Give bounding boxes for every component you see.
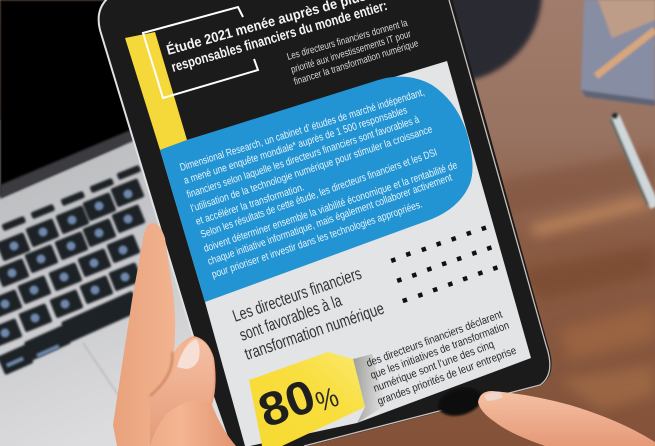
finger crease shadow [150,352,172,396]
thumb nail [177,339,200,369]
cube face [249,352,365,446]
left hand skin [113,223,236,446]
key legends [0,190,132,367]
cube shadow [353,354,386,423]
dark round object on desk [362,0,542,82]
tablet body [99,0,552,446]
notebook with pencil [581,0,655,106]
laptop [0,0,240,446]
section heading: transformation numérique [242,299,386,364]
intro paragraph: et accélérer la transformation. [194,181,306,228]
screen gray panel [160,61,531,446]
thumb highlight [150,338,214,446]
stat description: que les initiatives de transformation [369,320,511,382]
stat description [365,309,518,408]
tablet [99,0,552,446]
pen on desk [611,113,655,207]
stat description: grandes priorités de leur entreprise [376,345,518,408]
laptop hinge [0,128,140,199]
blue intro panel [160,77,473,302]
yellow side strip [125,32,187,150]
intro paragraph: financiers selon laquelle les directeurs financiers sont favorables à [185,114,421,201]
tablet silver edge left [99,0,228,446]
trackpad edge [83,343,125,405]
intro paragraph [178,86,459,281]
header [143,0,420,98]
tablet silver edge right [304,0,550,446]
left hand [113,223,236,446]
header subtitle: priorité aux investissements IT pour [290,29,413,76]
yellow cube with 80% [249,352,365,446]
home button [435,384,485,420]
header subtitle [286,18,420,88]
intro paragraph: l’utilisation de la technologie numérique pour stimuler la croissance [189,123,434,215]
header subtitle: Les directeurs financiers donnent la [286,18,409,63]
laptop screen [0,0,140,197]
stat description: numérique sont l’une des cinq [372,339,496,395]
right thumb nail [484,392,503,401]
intro paragraph: Dimensional Research, un cabinet d’ études de marché indépendant, [178,86,426,174]
header subtitle: financer la transformation numérique [293,38,420,88]
percent sign: % [311,381,343,418]
intro paragraph: a mené une enquête mondiale* auprès de 1 500 responsables [182,104,409,187]
stat description: des directeurs financiers déclarent [365,309,504,370]
right thumb [478,391,655,446]
intro paragraph: pour prioriser et investir dans les technologies appropriées. [210,198,424,281]
header white frame [143,7,258,98]
keyboard keys [0,165,146,375]
intro paragraph: Selon les résultats de cette étude, les directeurs financiers et les DSI [199,146,439,241]
section heading: Les directeurs financiers [230,264,364,326]
intro paragraph: chaque initiative informatique, mais également collaborer activement [206,172,454,268]
section heading [230,264,386,364]
stat number 80: 80 [251,368,322,437]
section heading: sont favorables à la [237,291,345,345]
dot grid decoration [390,225,498,303]
laptop body [0,120,240,446]
intro paragraph: doivent déterminer ensemble la viabilité économique et la rentabilité de [202,159,459,255]
right thumb skin [478,391,655,446]
